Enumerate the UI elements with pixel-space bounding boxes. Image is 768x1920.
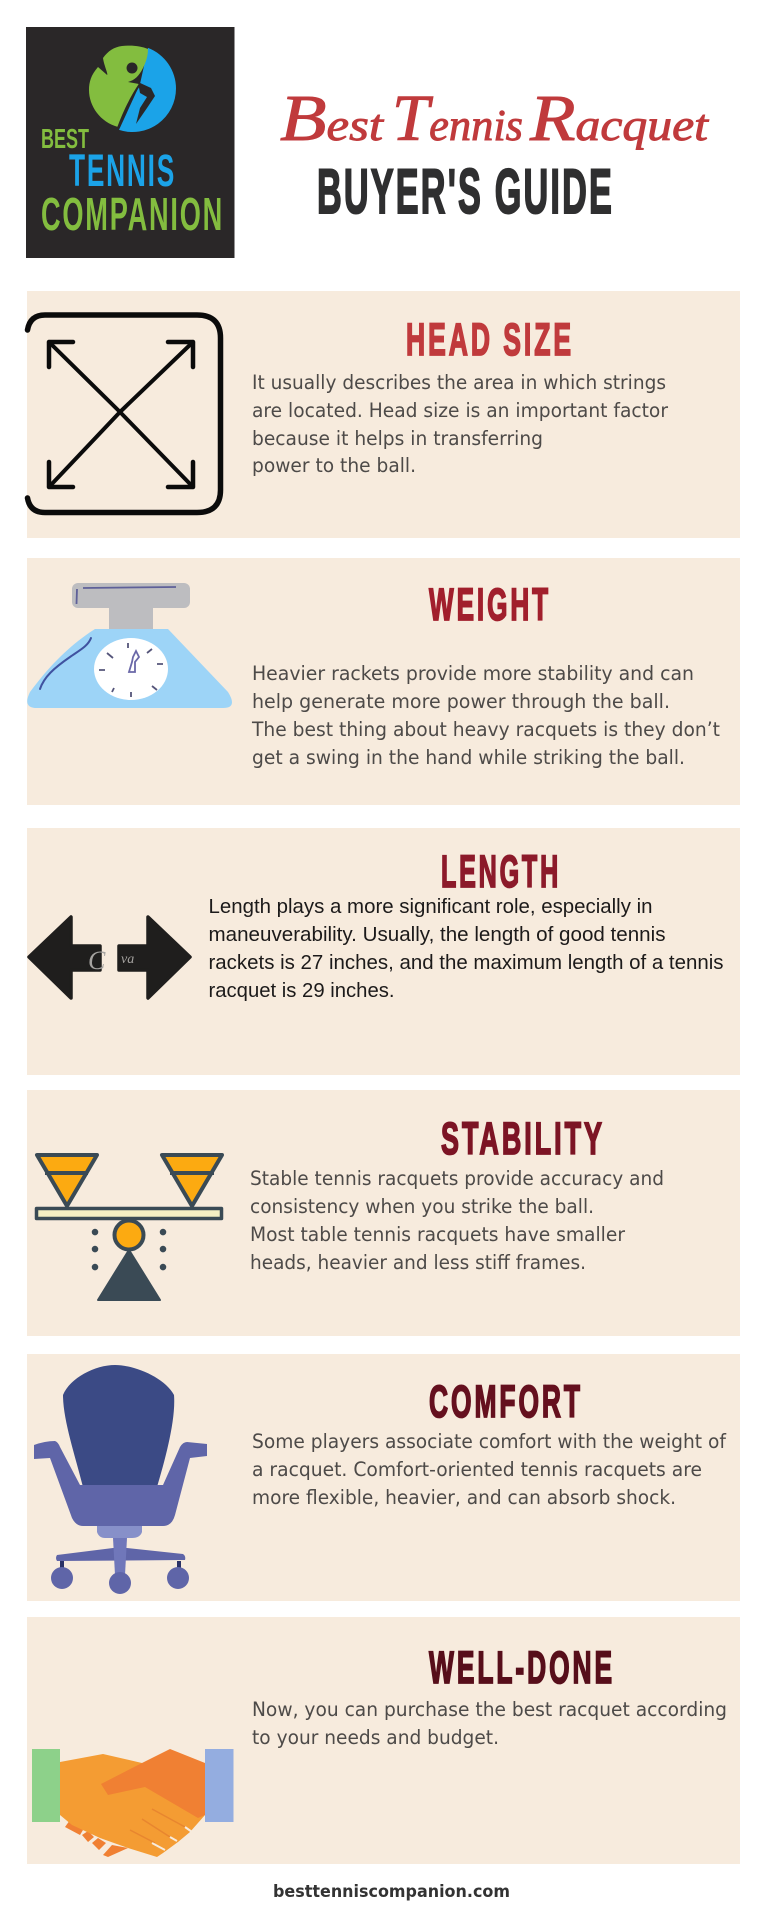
icon: balance — [36, 1155, 222, 1300]
icon: scale — [27, 583, 232, 708]
body text — [250, 1167, 664, 1274]
heading: LENGTH — [441, 846, 561, 897]
panel: length — [27, 828, 740, 1075]
body text: heads, heavier and less stiff frames. — [250, 1251, 586, 1274]
body text: power to the ball. — [252, 454, 416, 477]
title: script line: Racquet — [529, 82, 710, 155]
body text: Length plays a more significant role, especially in — [208, 896, 652, 918]
body text: a racquet. Comfort-oriented tennis racquets are — [252, 1458, 702, 1481]
logo text: BEST — [41, 123, 89, 154]
title: script line: Tennis — [392, 82, 523, 155]
heading: WELL-DONE — [429, 1642, 615, 1693]
body text: maneuverability. Usually, the length of good tennis — [208, 924, 666, 946]
icon: left and right arrows: C — [88, 946, 106, 975]
heading: WEIGHT — [429, 579, 551, 630]
icon: left and right arrows: va — [121, 952, 134, 967]
title: script line — [280, 82, 710, 155]
body text: to your needs and budget. — [252, 1726, 499, 1749]
body text: Stable tennis racquets provide accuracy and — [250, 1167, 664, 1190]
body text — [208, 896, 724, 1002]
body text: get a swing in the hand while striking the ball. — [252, 746, 685, 769]
body text: Some players associate comfort with the weight of — [252, 1430, 727, 1453]
body text: consistency when you strike the ball. — [250, 1195, 594, 1218]
icon: office chair — [34, 1365, 207, 1594]
logo — [26, 27, 234, 258]
body text: help generate more power through the ball. — [252, 690, 670, 713]
body text: Most table tennis racquets have smaller — [250, 1223, 626, 1246]
body text: more flexible, heavier, and can absorb shock. — [252, 1486, 676, 1509]
logo text: TENNIS — [69, 145, 176, 196]
body text — [252, 1698, 727, 1749]
title: script line: Best — [280, 82, 385, 155]
body text: are located. Head size is an important factor — [252, 399, 669, 422]
icon: expand arrows — [28, 315, 220, 512]
icon: handshake — [32, 1749, 234, 1857]
panel: well-done — [27, 1617, 740, 1864]
logo text — [41, 123, 224, 240]
panel: head size — [27, 291, 740, 538]
heading: COMFORT — [429, 1376, 583, 1427]
body text — [252, 1430, 727, 1509]
panel: comfort — [27, 1354, 740, 1601]
panel: weight — [27, 558, 740, 805]
body text: racquet is 29 inches. — [208, 980, 394, 1002]
heading: HEAD SIZE — [406, 314, 574, 365]
heading: STABILITY — [441, 1113, 605, 1164]
logo text: COMPANION — [41, 188, 224, 240]
body text: The best thing about heavy racquets is they don’t — [251, 718, 720, 741]
body text: Heavier rackets provide more stability and can — [252, 662, 694, 685]
logo emblem — [89, 46, 176, 132]
body text: It usually describes the area in which strings — [252, 371, 666, 394]
body text — [252, 371, 669, 477]
body text: because it helps in transferring — [252, 427, 543, 450]
panel: stability — [27, 1090, 740, 1336]
icon: left and right arrows — [29, 917, 190, 998]
footer url: besttenniscompanion.com — [273, 1882, 510, 1902]
body text: Now, you can purchase the best racquet according — [252, 1698, 727, 1721]
body text: rackets is 27 inches, and the maximum length of a tennis — [208, 952, 724, 974]
body text — [251, 662, 720, 769]
